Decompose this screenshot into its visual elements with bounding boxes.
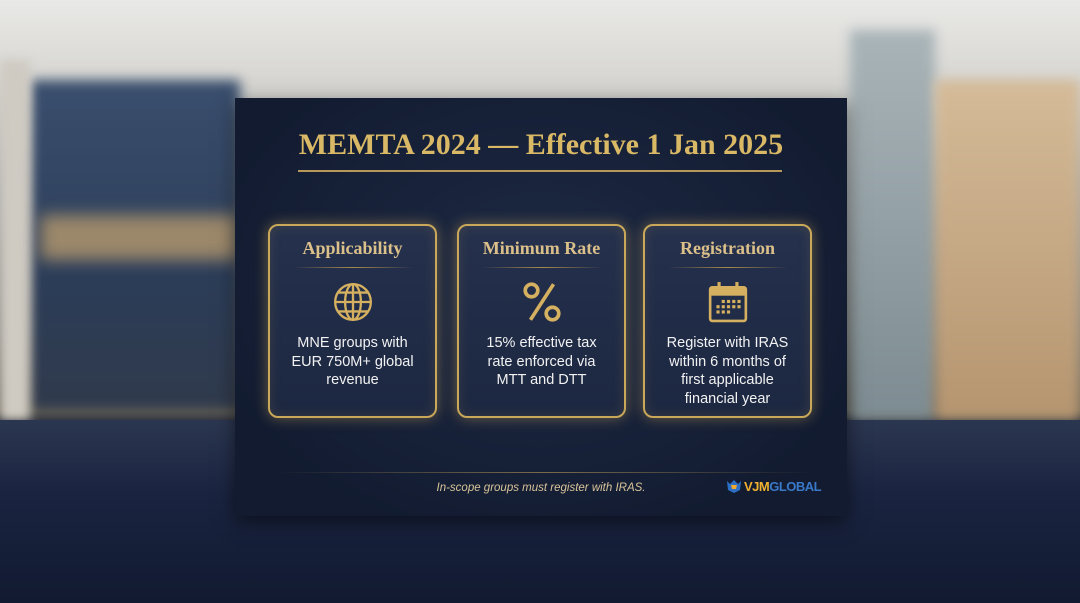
- icon: percent: [523, 282, 561, 322]
- card: applicability: [268, 224, 437, 418]
- background: right glass: [850, 30, 935, 420]
- card: registration: first applicable: [681, 372, 774, 388]
- card: applicability: EUR 750M+ global: [291, 354, 414, 370]
- card: registration: financial year: [685, 390, 770, 406]
- icon: globe: [334, 283, 372, 321]
- logo: GLOBAL: [769, 478, 821, 494]
- background: left pillar: [0, 60, 30, 420]
- card: minimum rate: rate enforced via: [487, 354, 596, 370]
- card: minimum rate: 15% effective tax: [486, 335, 597, 351]
- title: MEMTA 2024 — Effective 1 Jan 2025: [299, 128, 783, 161]
- footer divider: [275, 472, 815, 473]
- card: minimum rate: Minimum Rate: [483, 238, 600, 258]
- title underline: [298, 170, 782, 172]
- card: applicability: Applicability: [302, 238, 403, 258]
- card: minimum rate: [457, 224, 626, 418]
- background: left shelf glow: [40, 215, 240, 260]
- footer text: In-scope groups must register with IRAS.: [436, 482, 646, 494]
- board: [235, 98, 847, 516]
- icon: calendar: [708, 282, 748, 322]
- card: registration: Register with IRAS: [667, 335, 788, 351]
- background: left blue wall: [30, 80, 240, 410]
- card: registration: Registration: [680, 238, 775, 258]
- logo: VJM: [744, 478, 769, 494]
- card: registration: [643, 224, 812, 418]
- card: minimum rate: MTT and DTT: [497, 372, 586, 388]
- logo: [727, 478, 822, 494]
- background: table: [0, 420, 1080, 603]
- card: registration: within 6 months of: [669, 354, 786, 370]
- background: right wood: [935, 80, 1080, 420]
- card: applicability: MNE groups with: [297, 335, 408, 351]
- card: applicability: revenue: [326, 372, 379, 388]
